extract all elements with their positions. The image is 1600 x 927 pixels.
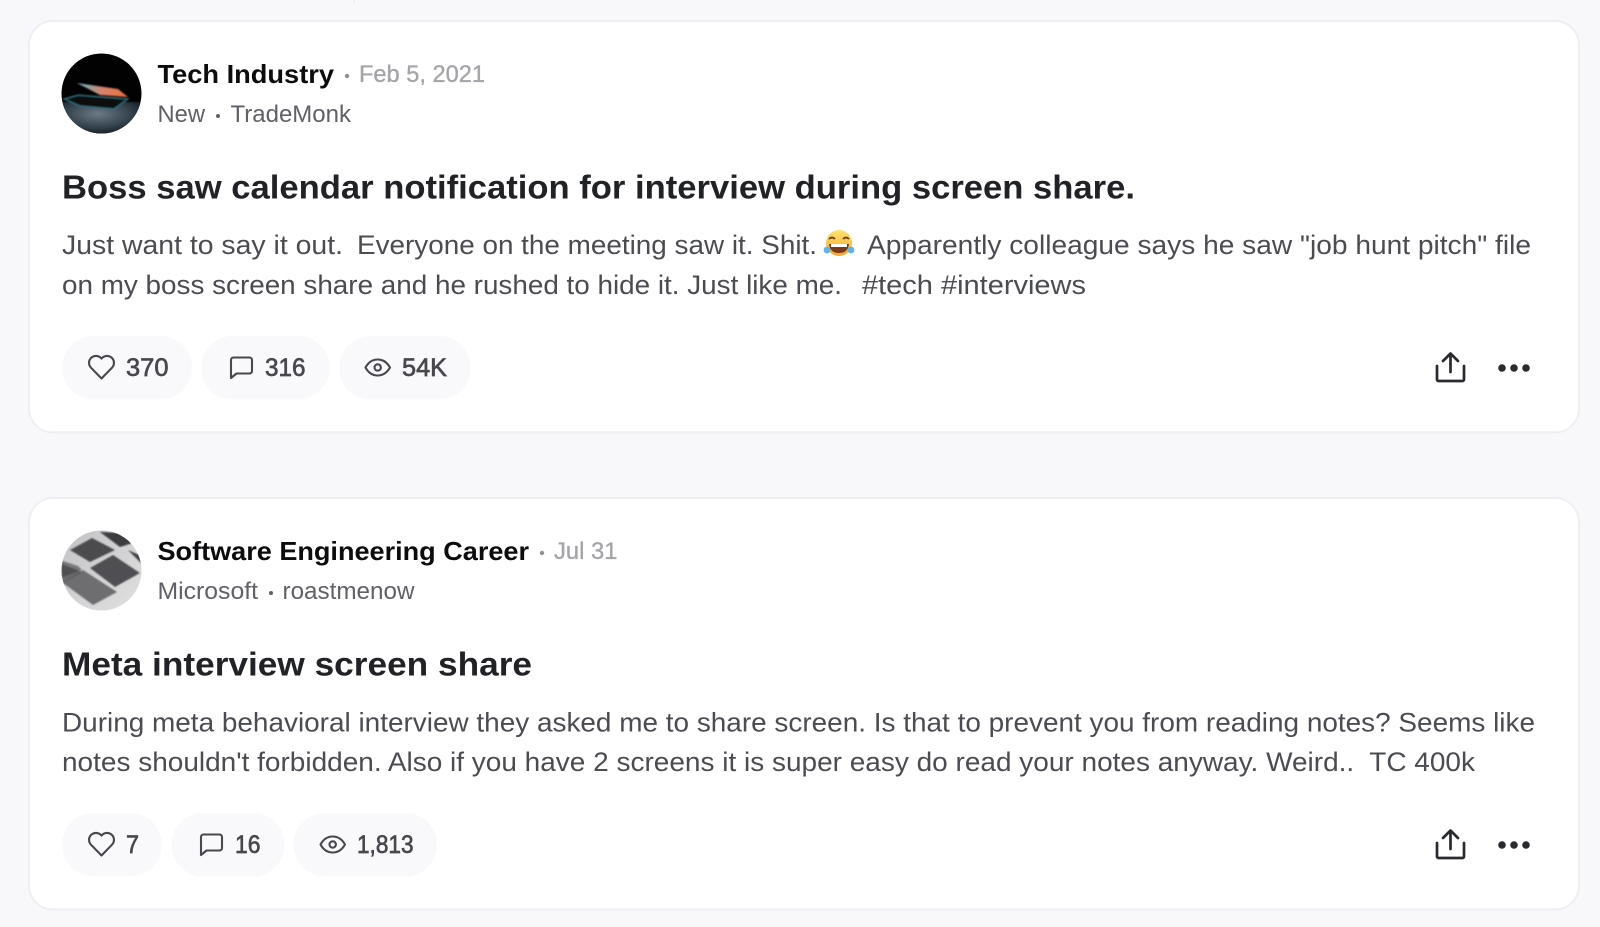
icon: share (1437, 830, 1464, 858)
author line: Tech Industry (158, 59, 335, 89)
view count pill: 1,813 (357, 831, 414, 859)
post body: Apparently colleague says he saw "job hunt pitch" file (867, 230, 1531, 260)
comment count pill (172, 813, 284, 876)
author line: Jul 31 (554, 538, 618, 565)
icon: keyboard avatar (62, 530, 142, 610)
author line: Software Engineering Career (158, 536, 529, 566)
icon: more options (1498, 841, 1530, 849)
like count pill (62, 813, 162, 876)
company and username line: roastmenow (282, 578, 415, 605)
post body: During meta behavioral interview they asked me to share screen. Is that to prevent you from reading notes? Seems like (62, 708, 1535, 738)
company and username line (158, 578, 415, 605)
company and username line (158, 101, 352, 128)
author line: Feb 5, 2021 (359, 61, 485, 88)
comment count pill: 316 (265, 354, 306, 382)
icon: comment bubble (201, 834, 222, 855)
post body: #tech #interviews (862, 270, 1086, 300)
author line (158, 59, 485, 89)
comment count pill: 16 (235, 831, 260, 859)
post body: on my boss screen share and he rushed to hide it. Just like me. (62, 270, 842, 300)
like count pill: 370 (126, 354, 168, 382)
company and username line: TradeMonk (230, 101, 352, 128)
icon: laughing emoji (824, 230, 854, 256)
like count pill: 7 (126, 831, 139, 859)
comment count pill (201, 336, 330, 400)
like count pill (62, 336, 192, 400)
icon: eye (320, 836, 345, 852)
icon: heart (89, 833, 114, 856)
icon: heart (89, 356, 114, 378)
view count pill (294, 813, 437, 876)
company and username line: Microsoft (158, 578, 258, 605)
view count pill: 54K (402, 354, 447, 382)
company and username line: New (158, 101, 205, 128)
post title: Meta interview screen share (62, 646, 532, 682)
icon: eye (366, 360, 390, 376)
post body: Just want to say it out. (62, 230, 343, 260)
icon: share (1437, 354, 1464, 381)
post body (62, 708, 1535, 777)
panel: post card 1 (29, 21, 1579, 432)
icon: tech industry avatar (60, 52, 144, 136)
view count pill (339, 336, 470, 400)
panel: post card 2 (29, 498, 1579, 910)
post body: notes shouldn't forbidden. Also if you have 2 screens it is super easy do read your notes anyway. Weird.. TC 400k (62, 747, 1476, 777)
post title: Boss saw calendar notification for interview during screen share. (62, 168, 1135, 206)
post body (62, 230, 1531, 300)
decorative tick at top (354, 0, 355, 3)
post body: Everyone on the meeting saw it. Shit. (357, 230, 817, 260)
icon: comment bubble (231, 358, 252, 378)
icon: more options (1498, 364, 1530, 372)
